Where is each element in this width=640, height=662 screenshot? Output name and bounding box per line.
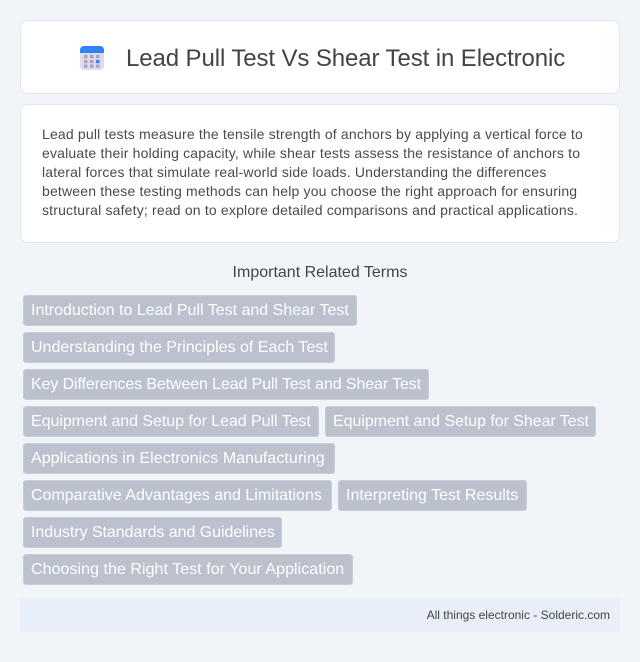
- icon: calendar: [80, 46, 104, 70]
- chip: [23, 295, 357, 326]
- footer text: All things electronic - Solderic.com: [427, 608, 610, 622]
- header panel: [20, 20, 620, 94]
- chip: [23, 443, 335, 474]
- chip: [23, 332, 335, 363]
- chip: Industry Standards and Guidelines: [31, 524, 275, 541]
- intro paragraph: structural safety; read on to explore detailed comparisons and practical applications.: [42, 202, 578, 218]
- related terms heading: Important Related Terms: [233, 264, 407, 281]
- chip: Applications in Electronics Manufacturing: [31, 450, 325, 467]
- chip: [23, 369, 429, 400]
- chip: [23, 480, 332, 511]
- footer bar: [20, 598, 620, 632]
- intro text panel: [20, 104, 620, 243]
- chip: [325, 406, 596, 437]
- chip: [23, 406, 319, 437]
- chip: Equipment and Setup for Lead Pull Test: [31, 413, 311, 430]
- intro paragraph: [42, 126, 583, 218]
- chip: Understanding the Principles of Each Test: [31, 339, 328, 356]
- title: Lead Pull Test Vs Shear Test in Electronic: [126, 45, 565, 72]
- chip: Equipment and Setup for Shear Test: [333, 413, 589, 430]
- intro paragraph: Lead pull tests measure the tensile strength of anchors by applying a vertical force to: [42, 126, 583, 142]
- related terms chips: [23, 295, 596, 585]
- chip: [23, 554, 353, 585]
- intro paragraph: lateral forces that simulate real-world side loads. Understanding the differences: [42, 164, 547, 180]
- chip: Introduction to Lead Pull Test and Shear Test: [31, 302, 349, 319]
- intro paragraph: evaluate their holding capacity, while shear tests assess the resistance of anchors to: [42, 145, 580, 161]
- intro paragraph: between these testing methods can help you choose the right approach for ensuring: [42, 183, 577, 199]
- chip: Comparative Advantages and Limitations: [31, 487, 322, 504]
- chip: Choosing the Right Test for Your Application: [31, 561, 344, 578]
- chip: Interpreting Test Results: [346, 487, 518, 504]
- chip: [338, 480, 527, 511]
- chip: Key Differences Between Lead Pull Test and Shear Test: [31, 376, 421, 393]
- chip: [23, 517, 282, 548]
